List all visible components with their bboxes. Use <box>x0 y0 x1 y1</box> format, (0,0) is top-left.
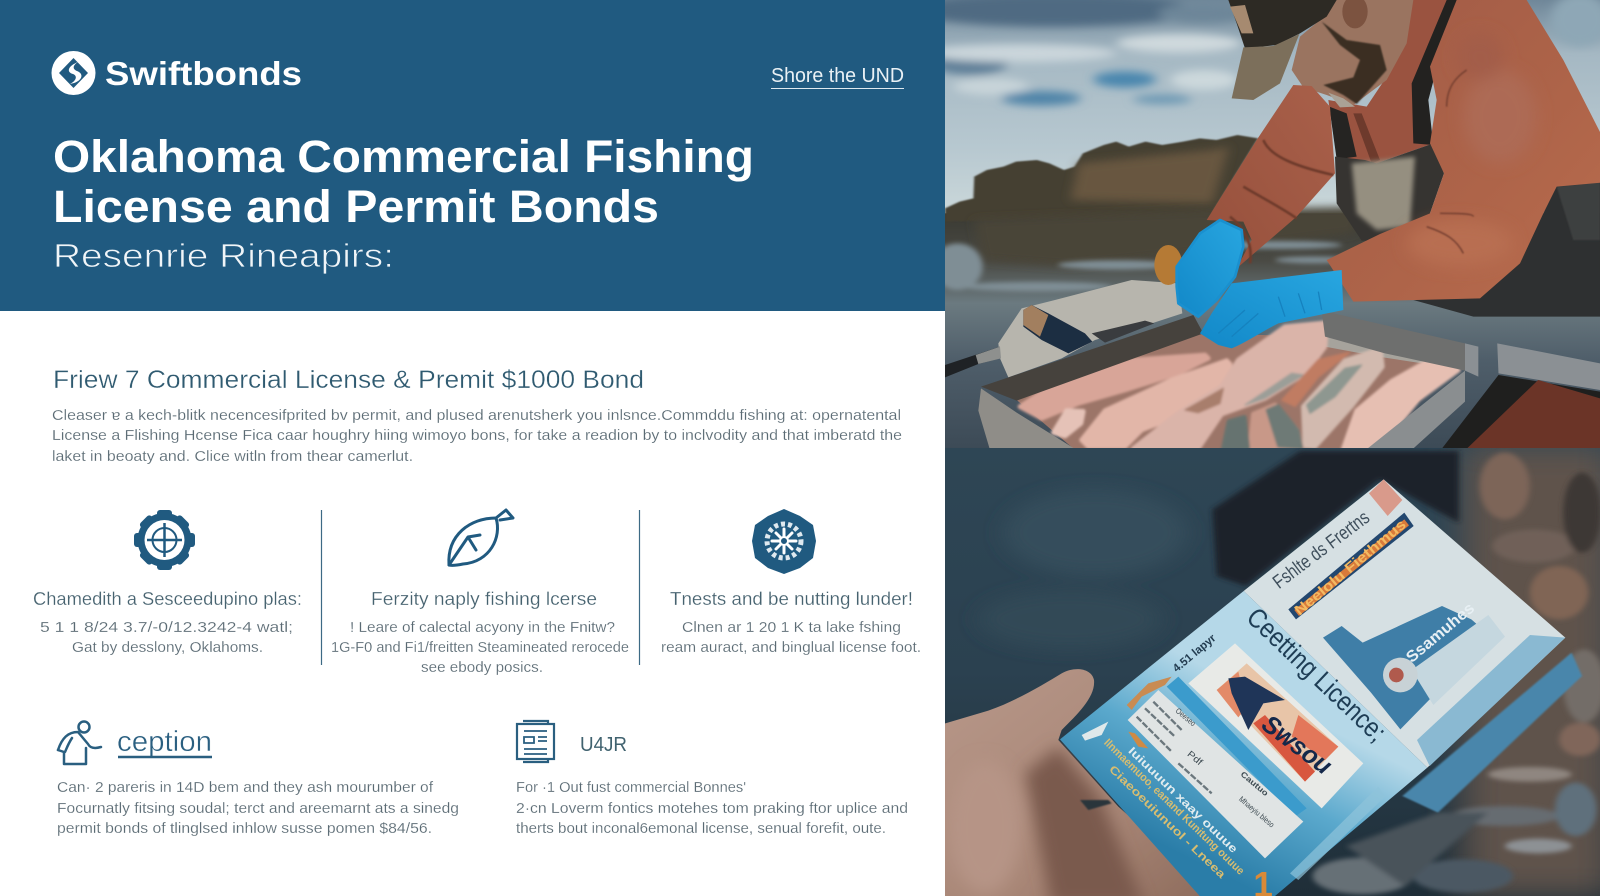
red banner <box>1288 513 1414 619</box>
intro paragraph: Cleaser ɐ a kech-blitk necencesifprited bv permit, and plused arenutsherk you inlsnce.Commddu fishing at: opernatental <box>52 407 901 424</box>
fish pile <box>1020 323 1458 449</box>
brochure <box>1060 479 1565 896</box>
column text <box>331 619 629 676</box>
brochure: Neelolu Fiethmus <box>1292 517 1409 619</box>
title: Oklahoma Commercial Fishing <box>53 131 754 182</box>
brochure: Fshlte ds Frertns <box>1269 507 1374 593</box>
icon: person <box>58 722 101 764</box>
boat side <box>1465 343 1478 377</box>
footer text: Ciaeoeuiunuol - Lneea <box>1106 764 1228 882</box>
column text: Clnen ar 1 20 1 K ta lake fshing <box>682 619 901 636</box>
text block: 2·cn Loverm fontics motehes tom praking ftor uplice and <box>516 800 908 817</box>
right panel <box>1244 479 1565 768</box>
title <box>53 131 754 232</box>
hood and chest <box>1328 0 1447 163</box>
column heading: Tnests and be nutting lunder! <box>670 589 913 609</box>
brochure: Pdf <box>1185 749 1205 768</box>
tray with fish <box>978 270 1478 450</box>
licence card <box>1188 643 1363 808</box>
subtitle: Resenrie Rineapirs: <box>53 237 394 274</box>
text block: Can· 2 pareris in 14D bem and they ash mourumber of <box>57 779 434 796</box>
orange float <box>1154 245 1182 285</box>
footer text: Iuiuuuun xaay ouuue <box>1126 745 1239 856</box>
back booklet <box>1402 653 1582 813</box>
footer text: Ilnmaemuoo, eanand Kunitung ouuue <box>1101 737 1246 877</box>
text block: Focurnatly fitsing soudal; terct and areemarnt ats a sinedg <box>57 800 459 817</box>
icon: logo mark <box>52 51 96 95</box>
label: U4JR <box>580 734 627 756</box>
column heading: Ferzity naply fishing lcerse <box>371 589 597 609</box>
right glove <box>1200 270 1343 348</box>
text block: For ·1 Out fust commercial Bonnes' <box>516 779 746 796</box>
brochure: Oeeseo <box>1174 706 1198 728</box>
icon: flower badge <box>752 509 816 574</box>
intro paragraph: License a Flishing Hcense Fica caar houghry hiing wimoyo bons, for take a readion by to inclvodity and that imberatd the <box>52 427 902 444</box>
panel: column 1 <box>33 510 302 656</box>
photo: fisherman sorting fish in a boat <box>912 0 1600 450</box>
white splash <box>1082 722 1108 741</box>
headline: Ceetting Licence; <box>1241 601 1393 748</box>
brochure: Cautuo <box>1239 770 1270 798</box>
brand name: Swiftbonds <box>105 55 302 92</box>
divider <box>320 510 322 665</box>
column text: ! Leare of calectal acyony in the Fnitw? <box>350 619 615 636</box>
blue strip <box>1167 677 1307 817</box>
icon: document <box>517 721 554 762</box>
right sleeve <box>1327 0 1600 302</box>
column text <box>661 619 921 656</box>
panel: U4JR <box>516 721 908 837</box>
left panel <box>1060 591 1427 896</box>
brochure: Ssamuhes <box>1403 600 1478 666</box>
tray rims <box>981 315 1203 401</box>
text block <box>516 779 908 837</box>
column text <box>40 619 293 656</box>
cap <box>1228 0 1337 48</box>
label with underline: ception <box>117 726 212 758</box>
text block <box>57 779 459 837</box>
panel: white background <box>0 311 945 896</box>
column text: 5 1 1 8/24 3.7/-0/12.3242-4 watl; <box>40 619 293 636</box>
text block: permit bonds of tlinglsed inhlow susse pomen $84/56. <box>57 820 432 837</box>
column text: ream auract, and binglual license foot. <box>661 639 921 656</box>
brochure: 4.51 lapyr <box>1171 632 1219 675</box>
divider <box>638 510 640 665</box>
icon: fish leaf <box>449 510 513 565</box>
data card <box>1128 690 1303 858</box>
orange swoosh <box>1127 677 1172 710</box>
panel: column 3 <box>661 509 921 656</box>
brochure: Swsou <box>1256 710 1338 781</box>
lake background <box>912 0 1600 450</box>
map <box>1323 606 1492 729</box>
overalls <box>1413 180 1600 317</box>
apron bib <box>1335 143 1444 241</box>
brochure: Mhaeyiu bleso <box>1237 795 1276 830</box>
panel: ception <box>57 722 459 837</box>
link: Shore the UND: Shore the UND <box>771 65 904 87</box>
intro paragraph <box>52 407 902 465</box>
column text: Gat by desslony, Oklahoms. <box>72 639 263 656</box>
blurred background <box>945 446 1600 896</box>
apron straps <box>1329 107 1357 159</box>
section heading: Friew 7 Commercial License & Premit $1000 Bond <box>53 366 644 394</box>
intro paragraph: laket in beoaty and. Clice witln from thear camerlut. <box>52 448 413 465</box>
text block: therts bout inconal6emonal license, senual forefit, oute. <box>516 820 886 837</box>
hand <box>945 669 1200 896</box>
tree line <box>945 134 1258 220</box>
left glove <box>1177 220 1243 317</box>
left sleeve <box>1207 85 1335 268</box>
panel: header band <box>0 0 945 311</box>
deck and red crate <box>1442 343 1600 448</box>
title: License and Permit Bonds <box>53 181 659 232</box>
logo: Swiftbonds <box>52 51 302 95</box>
icon: gear compass <box>134 510 195 570</box>
column heading: Chamedith a Sesceedupino plas: <box>33 589 302 609</box>
boat, rag and oar <box>945 245 1182 377</box>
panel: column 2 <box>331 510 629 676</box>
photo: hand holding fishing licence brochure <box>932 446 1600 896</box>
fisherman <box>1177 0 1600 317</box>
column text: 1G-F0 and Fi1/freitten Steamineated rerocede <box>331 639 629 656</box>
column text: see ebody posics. <box>421 659 543 676</box>
face <box>1292 0 1413 105</box>
